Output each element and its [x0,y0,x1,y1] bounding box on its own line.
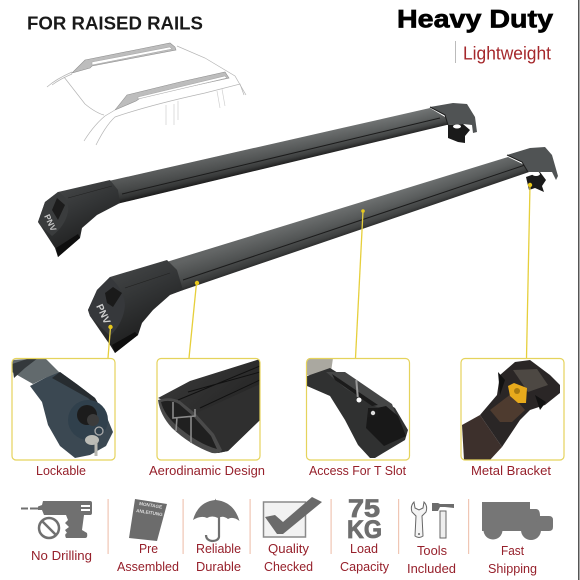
label: tools included [407,543,456,576]
label: access for t slot: Access For T Slot [309,463,406,478]
dividers between feature icons [108,499,469,554]
icon: manual, pre assembled: ANLEITUNG [136,508,164,517]
front roof bar [88,147,558,353]
icon: no drilling [21,501,92,538]
icon: manual, pre assembled [129,499,167,541]
label: tools included: Tools [417,543,447,558]
label: quality checked: Quality [268,541,309,556]
heading: lightweight: Lightweight [463,44,551,64]
callout leader lines [108,183,532,358]
right cap and clamp [507,147,558,180]
label: metal bracket: Metal Bracket [471,463,551,478]
icon: umbrella, reliable durable [193,498,240,541]
tube [160,157,535,298]
icon: 75 kg [347,495,382,544]
label: pre assembled: Pre [139,541,158,556]
rear roof bar: PNV [42,213,59,233]
icon: quality check [264,497,322,537]
icon: 75 kg: KG [347,516,382,544]
panel: aerodynamic design [157,358,260,460]
label: reliable durable: Reliable [196,541,241,556]
icon: tools [411,502,454,538]
label: aerodinamic design: Aerodinamic Design [149,463,265,478]
label: reliable durable [196,541,241,574]
label: fast shipping [488,543,537,576]
car roof line sketch [47,43,246,145]
label: load capacity [340,541,389,574]
label: pre assembled [117,541,179,574]
label: load capacity: Load [350,541,378,556]
icon: manual, pre assembled: MONTAGE [139,501,162,510]
tube [100,108,455,208]
panel: metal bracket [461,358,564,460]
icon: 75 kg: 75 [348,495,380,523]
icon: truck [482,502,553,540]
label: quality checked: Checked [264,559,313,574]
label: fast shipping: Shipping [488,561,537,576]
rear roof bar [38,103,477,257]
label: load capacity: Capacity [340,559,389,574]
label: pre assembled: Assembled [117,559,179,574]
left foot [38,180,120,257]
panel: access for t slot [306,358,410,460]
label: quality checked [264,541,313,574]
right cap and clamp [430,103,477,133]
heading: heavy duty: Heavy Duty [397,6,553,34]
left foot [88,260,183,353]
panel: lockable [12,358,115,460]
label: tools included: Included [407,561,456,576]
front roof bar: PNV [93,303,112,326]
label: lockable: Lockable [36,463,86,478]
heading: for raised rails: FOR RAISED RAILS [27,14,203,34]
label: no drilling: No Drilling [31,548,92,563]
label: reliable durable: Durable [196,559,241,574]
label: fast shipping: Fast [501,543,524,558]
